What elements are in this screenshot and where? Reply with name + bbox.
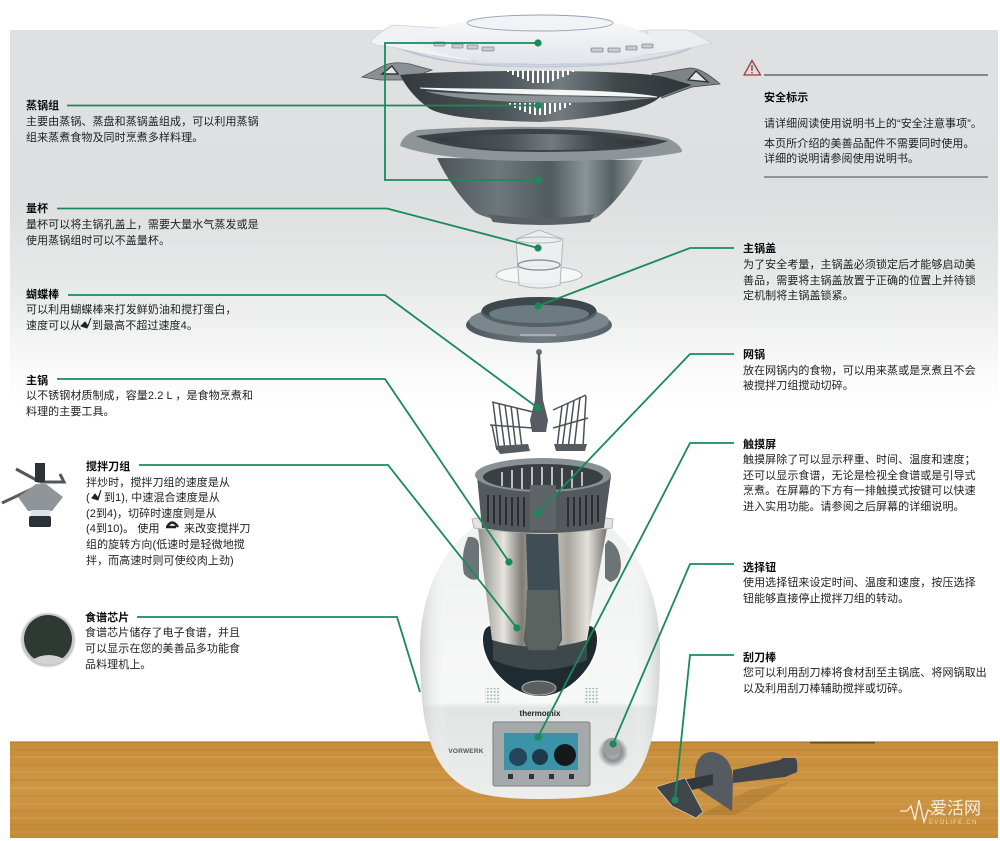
side grip: left <box>463 537 479 580</box>
text block: main bowl <box>26 373 253 418</box>
text block: spatula: 以及利用刮刀棒辅助搅拌或切碎。 <box>743 681 909 695</box>
text block: mixing blade: 拌炒时，搅拌刀组的速度是从 <box>86 475 230 489</box>
text block: touch screen: 触摸屏除了可以显示秤重、时间、温度和速度； <box>743 452 976 466</box>
panel: safety notice: 详细的说明请参阅使用说明书。 <box>764 151 919 165</box>
text block: pot lid: 主锅盖 <box>743 241 776 255</box>
text block: recipe chip: 品料理机上。 <box>85 657 151 671</box>
text block: mixing blade: 组的旋转方向(低速时是轻微地搅 <box>86 537 245 551</box>
icon: mixing blade set <box>2 463 64 527</box>
text block: selector knob: 使用选择钮来设定时间、温度和速度，按压选择 <box>743 575 976 589</box>
text block: measuring cup: 量杯 <box>26 201 48 215</box>
green leader lines <box>57 39 734 804</box>
watermark logo: EVOLIFE.CN <box>929 820 978 826</box>
side grip: right <box>605 540 621 582</box>
blade base <box>522 681 556 695</box>
text block: recipe chip: 食谱芯片储存了电子食谱，并且 <box>85 625 240 639</box>
text block: pot lid <box>743 241 976 302</box>
panel: safety notice: 请详细阅读使用说明书上的“安全注意事项”。 <box>764 116 982 130</box>
leader: steamer set <box>67 39 542 184</box>
text block: butterfly whisk <box>26 287 237 332</box>
text block: steamer set: 主要由蒸锅、蒸盘和蒸锅盖组成，可以利用蒸锅 <box>26 114 259 128</box>
text block: measuring cup <box>26 201 259 247</box>
text block: mixing blade: 到1), 中速混合速度是从 <box>104 490 220 504</box>
text block: recipe chip: 可以显示在您的美善品多功能食 <box>85 641 240 655</box>
text block: mixing blade <box>86 459 250 567</box>
text block: main bowl: 料理的主要工具。 <box>26 404 115 418</box>
text block: measuring cup: 使用蒸锅组时可以不盖量杯。 <box>26 233 170 247</box>
panel: grey gradient background <box>10 30 998 405</box>
panel: safety notice <box>744 60 988 177</box>
brand: vorwerk: VORWERK <box>448 748 484 755</box>
text block: measuring cup: 量杯可以将主锅孔盖上，需要大量水气蒸发或是 <box>26 217 259 231</box>
text block: main bowl: 主锅 <box>26 373 48 387</box>
motor well <box>482 625 598 697</box>
text block: touch screen <box>743 437 976 513</box>
text block: basket: 被搅拌刀组搅动切碎。 <box>743 378 854 392</box>
illustration: measuring cup <box>496 230 582 288</box>
panel: safety notice: 安全标示 <box>764 90 808 104</box>
text block: butterfly whisk: 到最高不超过速度4。 <box>92 318 198 332</box>
panel: wooden table <box>10 742 998 838</box>
text block: butterfly whisk: 可以利用蝴蝶棒来打发鲜奶油和搅打蛋白， <box>26 302 237 316</box>
icon: warning triangle <box>744 60 760 75</box>
leader: mixing bowl <box>57 379 513 566</box>
leader: spatula <box>671 655 734 804</box>
text block: main bowl: 以不锈钢材质制成，容量2.2 L ，是食物烹煮和 <box>26 388 253 402</box>
illustration: butterfly whisk <box>490 349 588 454</box>
text block: recipe chip <box>85 610 240 671</box>
text block: spatula <box>743 650 987 695</box>
text block: mixing blade: 来改变搅拌刀 <box>184 521 250 535</box>
leader: selector <box>609 564 734 748</box>
text block: mixing blade: ( <box>86 492 90 504</box>
text block: pot lid: 为了安全考量，主锅盖必须锁定后才能够启动美 <box>743 257 976 271</box>
panel: safety notice: 本页所介绍的美善品配件不需要同时使用。 <box>764 136 975 150</box>
text block: mixing blade: (4到10)。 使用 <box>86 522 160 535</box>
illustration: simmering basket <box>475 458 611 533</box>
selector knob <box>598 737 628 767</box>
text block: recipe chip: 食谱芯片 <box>85 610 129 624</box>
touch screen <box>493 722 590 786</box>
text block: selector knob <box>743 560 976 605</box>
leader: lid <box>534 248 734 310</box>
leader: touch screen <box>534 443 734 741</box>
illustration: mixing bowl <box>472 512 613 670</box>
text block: selector knob: 钮能够直接停止搅拌刀组的转动。 <box>743 591 909 605</box>
text block: butterfly whisk: 速度可以从 <box>26 318 81 332</box>
leader: blade <box>139 465 521 632</box>
text block: butterfly whisk: 蝴蝶棒 <box>26 287 59 301</box>
text block: touch screen: 还可以显示食谱，无论是检视全食谱或是引导式 <box>743 468 976 482</box>
watermark logo <box>900 799 981 826</box>
leader: recipe chip <box>137 617 420 692</box>
text block: basket <box>743 347 976 392</box>
illustration: spatula <box>656 752 797 818</box>
illustration: steamer lid <box>370 15 712 67</box>
text block: pot lid: 善品，需要将主锅盖放置于正确的位置上并待锁 <box>743 273 976 287</box>
text block: pot lid: 定机制将主锅盖锁紧。 <box>743 288 854 302</box>
text block: mixing blade: (2到4)，切碎时速度则是从 <box>86 506 217 520</box>
leader: measuring cup <box>57 208 542 252</box>
text block: basket: 放在网锅内的食物，可以用来蒸或是烹煮且不会 <box>743 363 976 377</box>
text block: mixing blade: 拌，而高速时则可使绞肉上劲) <box>86 553 234 567</box>
illustration: main pot lid <box>466 297 612 343</box>
text block: spatula: 刮刀棒 <box>743 650 776 664</box>
leader: butterfly whisk <box>68 295 542 412</box>
icon: recipe chip <box>21 613 75 667</box>
text block: touch screen: 触摸屏 <box>743 437 776 451</box>
text block: spatula: 您可以利用刮刀棒将食材刮至主锅底、将网锅取出 <box>743 665 987 679</box>
text block: touch screen: 烹煮。在屏幕的下方有一排触摸式按键可以快速 <box>743 483 976 497</box>
text block: steamer set: 组来蒸煮食物及同时烹煮多样料理。 <box>26 130 203 144</box>
text block: mixing blade: 搅拌刀组 <box>86 459 130 473</box>
watermark logo: 爱活网 <box>930 799 981 818</box>
illustration: main machine body <box>420 523 660 799</box>
text block: steamer set: 蒸锅组 <box>26 98 59 112</box>
leader: basket <box>534 354 734 517</box>
brand: thermomix: thermomix <box>520 709 561 718</box>
text block: touch screen: 进入实用功能。请参阅之后屏幕的详细说明。 <box>743 499 965 513</box>
illustration: steaming tray <box>362 63 720 122</box>
illustration: steamer bowl <box>400 127 682 225</box>
text block: steamer set <box>26 98 259 144</box>
text block: selector knob: 选择钮 <box>743 560 776 574</box>
speaker dots <box>485 688 500 703</box>
text block: basket: 网锅 <box>743 347 765 361</box>
